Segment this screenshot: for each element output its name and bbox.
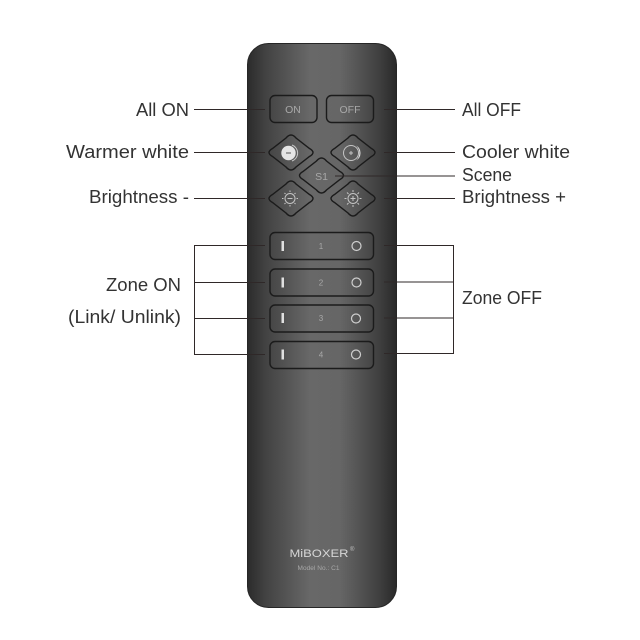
button: cooler white — [331, 135, 375, 170]
label: Cooler white: Cooler white — [462, 142, 570, 162]
button: brightness plus — [331, 181, 375, 216]
model number: Model No.: C1 — [298, 565, 340, 572]
zone 2 button: 2 — [319, 278, 324, 288]
zone 1 button: 1 — [319, 242, 324, 251]
label: Warmer white: Warmer white — [66, 142, 189, 162]
label: All ON: All ON — [136, 100, 189, 120]
zone 4 button: 4 — [319, 350, 324, 360]
zone 3 button — [270, 305, 374, 332]
remote control body — [248, 44, 396, 608]
label: Brightness minus: Brightness - — [89, 187, 189, 207]
button: warmer white — [269, 135, 313, 170]
button: ON: ON — [285, 104, 301, 116]
button: brightness minus — [269, 181, 313, 216]
leader lines — [194, 110, 455, 354]
button: OFF — [326, 96, 374, 122]
brand logo: ® — [350, 546, 355, 553]
label: Scene: Scene — [462, 165, 512, 185]
zone 4 button — [270, 342, 374, 368]
label: Link / Unlink: (Link/ Unlink) — [68, 307, 181, 327]
label: Zone ON: Zone ON — [106, 275, 181, 295]
button: OFF: OFF — [340, 104, 360, 116]
zone 1 button — [270, 232, 374, 260]
brand logo: MiBOXER — [290, 548, 349, 560]
brand logo — [290, 546, 355, 560]
button: scene S1: S1 — [315, 171, 328, 183]
button: ON — [270, 96, 317, 122]
label: Zone OFF: Zone OFF — [462, 288, 542, 308]
label: All OFF: All OFF — [462, 100, 521, 120]
button: scene S1 — [300, 158, 344, 193]
zone 3 button: 3 — [319, 314, 324, 323]
zone 2 button — [270, 269, 374, 296]
label: Brightness plus: Brightness + — [462, 187, 566, 207]
